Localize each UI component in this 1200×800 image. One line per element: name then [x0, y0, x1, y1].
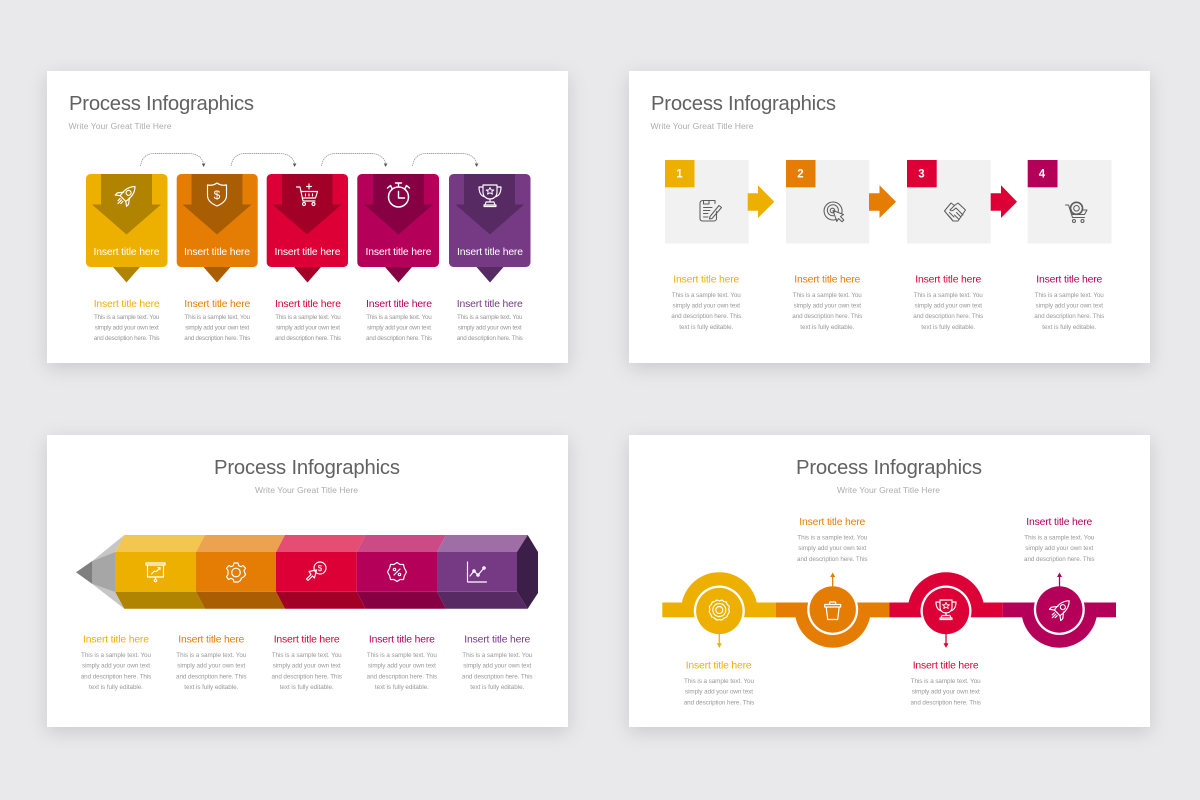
- title: Process Infographics: [214, 457, 400, 479]
- icon: shopping cart: [296, 184, 318, 206]
- text block 2: This is a sample text. You: [793, 292, 862, 299]
- text block 3: and description here. This: [271, 674, 342, 680]
- text block 5: [457, 299, 523, 342]
- text block 3: This is a sample text. You: [914, 292, 983, 299]
- text block 3: Insert title here: [274, 634, 340, 646]
- text block 1: text is fully editable.: [679, 324, 734, 331]
- text block 3: simply add your own text: [273, 663, 341, 670]
- text block 3: Insert title here: [915, 274, 982, 286]
- text block 3: simply add your own text: [276, 324, 340, 332]
- text block 2: [184, 299, 251, 342]
- text block 1: simply add your own text: [685, 689, 753, 696]
- step card 4: stopwatch: [357, 174, 439, 282]
- text block 4: simply add your own text: [368, 663, 436, 670]
- panel: arrow cards process: [47, 71, 568, 363]
- icon: trophy: [479, 185, 501, 206]
- text block 4: simply add your own text: [1025, 545, 1094, 552]
- text block 2: and description here. This: [176, 674, 247, 680]
- text block 1: and description here. This: [94, 335, 160, 342]
- arrow 3: [991, 185, 1017, 218]
- text block 5: This is a sample text. You: [457, 314, 523, 321]
- pencil segment 5: [437, 535, 528, 609]
- text block 1: [94, 299, 160, 342]
- arrow 1: [748, 185, 774, 218]
- text block 3: [913, 274, 983, 331]
- panel: wave timeline process: [629, 435, 1150, 727]
- icon: gear: [226, 563, 246, 582]
- text block 2: Insert title here: [794, 274, 861, 286]
- text block 4: simply add your own text: [1036, 302, 1103, 310]
- text block 2: [792, 274, 862, 331]
- text block 2: and description here. This: [184, 335, 250, 342]
- text block 5: simply add your own text: [463, 663, 532, 670]
- timeline node 2: [776, 572, 889, 648]
- icon: rocket: [112, 181, 141, 209]
- text block 3: This is a sample text. You: [911, 678, 981, 685]
- step card 4: stopwatch: Insert title here: [366, 247, 432, 258]
- text block 5: Insert title here: [457, 299, 523, 310]
- icon: document and pen: [700, 200, 722, 221]
- text block 3: and description here. This: [275, 335, 341, 342]
- icon: target with cursor: [824, 202, 844, 222]
- step card 5: trophy: Insert title here: [457, 247, 523, 258]
- timeline node 1: [662, 572, 776, 648]
- icon: trash can: [825, 602, 841, 620]
- text block 4: This is a sample text. You: [1035, 292, 1104, 299]
- text block 3: This is a sample text. You: [272, 652, 342, 659]
- text block 3: [275, 299, 341, 342]
- text block 3: Insert title here: [913, 660, 979, 672]
- pencil segment 3: [276, 535, 366, 609]
- icon: handshake: [944, 203, 966, 221]
- text block 4: This is a sample text. You: [366, 314, 432, 321]
- text block 1: and description here. This: [81, 674, 151, 680]
- pencil segment 1: [115, 535, 205, 609]
- text block 1: This is a sample text. You: [81, 652, 151, 659]
- text block 4: [1034, 274, 1104, 331]
- text block 1: This is a sample text. You: [672, 292, 741, 299]
- text block 4: Insert title here: [369, 634, 435, 646]
- text block 4: simply add your own text: [367, 324, 431, 332]
- pencil segment 2: [196, 535, 285, 609]
- text block 2: and description here. This: [797, 556, 868, 563]
- text block 2: text is fully editable.: [184, 684, 239, 691]
- text block 1: [671, 274, 741, 331]
- text block 5: [462, 634, 533, 691]
- text block 2: simply add your own text: [185, 324, 250, 332]
- text block 3: [271, 634, 342, 691]
- text block 5: and description here. This: [462, 674, 533, 680]
- timeline node 3: [889, 572, 1003, 648]
- step 4 square: 4: [1039, 168, 1046, 180]
- text block 3: and description here. This: [913, 313, 983, 320]
- icon: shield dollar: $: [214, 188, 221, 202]
- title: Process Infographics: [651, 93, 836, 115]
- text block 2: simply add your own text: [794, 302, 861, 310]
- text block 1: and description here. This: [671, 313, 741, 320]
- step 1 square: 1: [676, 168, 683, 180]
- text block 2: simply add your own text: [798, 545, 867, 552]
- panel: numbered squares process: [629, 71, 1150, 363]
- step card 3: cart: [267, 174, 348, 282]
- text block 1: simply add your own text: [95, 324, 159, 332]
- text block 3: simply add your own text: [912, 689, 980, 696]
- text block 4: This is a sample text. You: [1024, 534, 1095, 542]
- text block 5: This is a sample text. You: [462, 652, 533, 659]
- text block 1: simply add your own text: [673, 302, 740, 310]
- text block 4: and description here. This: [1034, 313, 1104, 320]
- timeline node 4: [1003, 572, 1116, 648]
- text block 1: [684, 660, 754, 707]
- subtitle: Write Your Great Title Here: [650, 121, 754, 131]
- text block 3: [910, 660, 981, 707]
- text block 5: Insert title here: [464, 634, 531, 646]
- step card 2: shield: Insert title here: [184, 247, 250, 258]
- text block 4: text is fully editable.: [375, 684, 429, 691]
- arrow 2: [869, 185, 896, 218]
- text block 4: [366, 299, 432, 342]
- icon: gear: [709, 600, 729, 620]
- icon: trophy: [936, 600, 956, 620]
- text block 5: and description here. This: [457, 335, 523, 342]
- step card 2: shield: [177, 174, 258, 282]
- text block 2: Insert title here: [799, 517, 866, 528]
- text block 2: [797, 517, 868, 563]
- text block 2: Insert title here: [184, 299, 251, 310]
- text block 4: [1024, 517, 1095, 563]
- pencil end cap: [517, 535, 538, 609]
- step card 5: trophy: [449, 174, 530, 282]
- text block 1: [81, 634, 151, 691]
- step 4 square: [1028, 160, 1112, 244]
- text block 5: simply add your own text: [458, 324, 522, 332]
- text block 1: simply add your own text: [82, 663, 150, 670]
- text block 1: Insert title here: [686, 660, 752, 672]
- text block 2: This is a sample text. You: [185, 314, 251, 321]
- text block 2: Insert title here: [178, 634, 245, 646]
- text block 1: This is a sample text. You: [94, 314, 160, 321]
- text block 1: Insert title here: [673, 274, 740, 286]
- text block 4: and description here. This: [1024, 556, 1095, 563]
- curved connectors: [140, 154, 478, 167]
- text block 2: simply add your own text: [177, 663, 246, 670]
- text block 1: Insert title here: [94, 299, 160, 310]
- icon: percent badge: [388, 562, 406, 582]
- icon: line chart: [468, 562, 486, 582]
- text block 3: text is fully editable.: [921, 324, 976, 331]
- text block 2: This is a sample text. You: [176, 652, 247, 659]
- step 2 square: 2: [797, 168, 804, 180]
- text block 4: and description here. This: [367, 674, 437, 680]
- title: Process Infographics: [796, 457, 982, 479]
- text block 3: This is a sample text. You: [275, 314, 341, 321]
- text block 4: [367, 634, 437, 691]
- title: Process Infographics: [69, 93, 254, 115]
- panel: pencil process: [47, 435, 568, 727]
- icon: cart with gear: [1066, 202, 1087, 222]
- text block 3: text is fully editable.: [280, 684, 334, 691]
- text block 3: simply add your own text: [915, 302, 982, 310]
- step 3 square: [907, 160, 991, 244]
- step 2 square: [786, 160, 869, 244]
- step card 3: cart: Insert title here: [274, 247, 341, 258]
- icon: rocket: [1047, 595, 1075, 623]
- icon: stopwatch: [388, 183, 410, 207]
- text block 3: and description here. This: [910, 700, 981, 707]
- pencil tip: [76, 535, 124, 609]
- text block 4: This is a sample text. You: [367, 652, 437, 659]
- step card 1: rocket: [86, 174, 168, 282]
- text block 4: and description here. This: [366, 335, 432, 342]
- icon: presentation board: [146, 563, 165, 582]
- text block 2: [176, 634, 247, 691]
- text block 2: text is fully editable.: [800, 324, 855, 331]
- text block 1: Insert title here: [83, 634, 149, 646]
- text block 4: Insert title here: [1036, 274, 1103, 286]
- step card 1: rocket: Insert title here: [94, 247, 160, 258]
- text block 4: text is fully editable.: [1042, 324, 1097, 331]
- icon: cursor and dollar coin: $: [318, 564, 323, 573]
- text block 1: text is fully editable.: [89, 684, 143, 691]
- subtitle: Write Your Great Title Here: [68, 121, 172, 131]
- text block 1: and description here. This: [684, 700, 754, 707]
- pencil segment 4: [357, 535, 446, 609]
- text block 2: and description here. This: [792, 313, 862, 320]
- text block 1: This is a sample text. You: [684, 678, 754, 685]
- step 1 square: [665, 160, 749, 244]
- text block 4: Insert title here: [366, 299, 432, 310]
- text block 3: Insert title here: [275, 299, 341, 310]
- subtitle: Write Your Great Title Here: [255, 485, 358, 495]
- text block 5: text is fully editable.: [470, 684, 525, 691]
- subtitle: Write Your Great Title Here: [837, 485, 940, 495]
- text block 4: Insert title here: [1026, 517, 1093, 528]
- text block 2: This is a sample text. You: [797, 534, 868, 542]
- step 3 square: 3: [918, 168, 925, 180]
